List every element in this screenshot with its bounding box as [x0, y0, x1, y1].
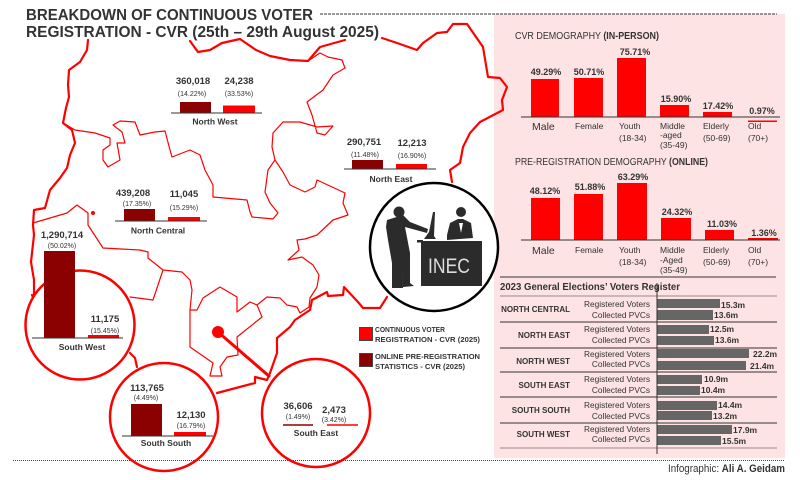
bar chart: CVR demography in-person: Middle [660, 121, 685, 131]
credit: Infographic: Ali A. Geidam [668, 463, 785, 475]
zone: North Central: North Central [131, 226, 185, 236]
table: 2023 voters register by zone: NORTH WEST [516, 357, 570, 366]
zone: South West callout: South West [59, 342, 105, 352]
table: 2023 voters register by zone: NORTH CENTRAL [501, 305, 570, 314]
bar chart: CVR demography in-person: (50-69) [703, 133, 731, 143]
zone: South East callout: 2,473 [322, 405, 346, 416]
zone: North East: (16.90%) [398, 153, 426, 160]
zone: North West: 360,018 [176, 76, 210, 87]
zone: North West: (33.53%) [225, 91, 253, 98]
table: 2023 voters register by zone: 21.4m [750, 361, 775, 371]
legend: ONLINE PRE-REGISTRATION [375, 354, 480, 361]
bar chart: pre-registration demography online: Elderly [703, 245, 730, 255]
heading: CVR demography: CVR DEMOGRAPHY (IN-PERSON) [515, 31, 659, 42]
zone: South West callout: (50.02%) [48, 243, 76, 250]
bar chart: CVR demography in-person: (18-34) [619, 133, 647, 143]
INEC badge icon: INEC [428, 255, 470, 278]
bar chart: pre-registration demography online: Middle [660, 245, 685, 255]
heading: pre-registration demography: PRE-REGISTRATION DEMOGRAPHY (ONLINE) [515, 157, 708, 168]
table: 2023 voters register by zone: 10.9m [704, 374, 729, 384]
table: 2023 voters register by zone: Registered Voters [584, 324, 650, 334]
bar chart: CVR demography in-person: Old [748, 121, 762, 131]
zone: South South callout: South South [141, 438, 191, 448]
title [26, 7, 379, 41]
table: 2023 voters register by zone: NORTH EAST [518, 331, 570, 340]
table: 2023 voters register by zone: Collected PVCs [592, 310, 650, 320]
heading: 2023 voters register: 2023 General Elections’ Voters Register [500, 281, 680, 293]
zone: South West callout: 1,290,714 [41, 230, 84, 241]
bar chart: CVR demography in-person: 50.71% [574, 67, 604, 77]
bar chart: pre-registration demography online: Male [532, 245, 555, 257]
bar chart: CVR demography in-person: 0.97% [749, 106, 775, 116]
zone: South South callout: (16.79%) [177, 423, 205, 430]
table: 2023 voters register by zone: 12.5m [710, 324, 735, 334]
zone: South South callout: (4.49%) [134, 395, 158, 402]
zone: North Central [115, 188, 207, 236]
zone: North East: North East [370, 174, 413, 184]
bar chart: pre-registration demography online [521, 172, 780, 275]
connector from map to South East callout [212, 326, 270, 377]
legend: STATISTICS - CVR (2025) [375, 364, 465, 371]
bar chart: pre-registration demography online: Old [748, 245, 762, 255]
panel: demography and register background [494, 14, 785, 458]
zone: South South callout: 113,765 [130, 383, 165, 394]
zone: South East callout: South East [294, 428, 338, 438]
zone: North East [344, 137, 436, 184]
zone: South South callout [110, 363, 218, 471]
bar chart: CVR demography in-person: Elderly [703, 121, 730, 131]
table: 2023 voters register by zone [500, 283, 778, 454]
table: 2023 voters register by zone: Registered Voters [584, 374, 650, 384]
table: 2023 voters register by zone: Registered Voters [584, 400, 650, 410]
bar chart: pre-registration demography online: (50-69) [703, 257, 731, 267]
bar chart: CVR demography in-person: -aged [660, 130, 682, 140]
zone: South East callout: (1.49%) [286, 414, 310, 421]
bar chart: CVR demography in-person: Youth [619, 121, 641, 131]
table: 2023 voters register by zone: SOUTH SOUTH [512, 406, 570, 415]
bar chart: pre-registration demography online: (70+) [748, 257, 768, 267]
legend: REGISTRATION - CVR (2025) [375, 337, 480, 344]
table: 2023 voters register by zone: 13.2m [713, 411, 738, 421]
zone: South West callout: (15.45%) [91, 328, 119, 335]
bar chart: CVR demography in-person: Female [575, 121, 604, 131]
zone: North West: North West [192, 116, 238, 126]
table: 2023 voters register by zone: Registered Voters [584, 349, 650, 359]
legend: CONTINUOUS VOTER [375, 327, 445, 334]
bar chart: CVR demography in-person: (35-49) [660, 140, 688, 150]
bar chart: pre-registration demography online: 1.36% [751, 228, 777, 238]
table: 2023 voters register by zone: Collected PVCs [592, 385, 650, 395]
zone: South West callout: 11,175 [91, 314, 120, 325]
bar chart: pre-registration demography online: 51.88% [575, 182, 605, 192]
zone: North East: (11.48%) [351, 152, 379, 159]
bar chart: CVR demography in-person: 49.29% [531, 67, 561, 77]
table: 2023 voters register by zone: 14.4m [718, 400, 743, 410]
table: 2023 voters register by zone: 10.4m [701, 385, 726, 395]
zone: North East: 12,213 [397, 138, 427, 149]
zone: South West callout [26, 230, 134, 380]
table: 2023 voters register by zone: Registered Voters [584, 299, 650, 309]
bar chart: pre-registration demography online: Youth [619, 245, 641, 255]
bar chart: pre-registration demography online: -Aged [660, 255, 683, 265]
zone: North West [171, 76, 262, 126]
title: BREAKDOWN OF CONTINUOUS VOTER [26, 7, 313, 24]
bar chart: CVR demography in-person: 17.42% [703, 101, 733, 111]
map of Nigeria with geopolitical zones [31, 24, 507, 393]
bar chart: CVR demography in-person: 15.90% [661, 94, 691, 104]
bar chart: CVR demography in-person: 75.71% [620, 47, 650, 57]
bar chart: CVR demography in-person [521, 47, 780, 150]
zone: North East: 290,751 [347, 137, 382, 148]
bar chart: pre-registration demography online: (18-34) [619, 257, 647, 267]
table: 2023 voters register by zone: 17.9m [733, 425, 758, 435]
zone: South East callout [262, 359, 370, 467]
bar chart: pre-registration demography online: (35-49) [660, 265, 688, 275]
bar chart: pre-registration demography online: Female [575, 245, 604, 255]
zone: South East callout: (3.42%) [322, 417, 346, 424]
zone: North West: (14.22%) [178, 91, 206, 98]
zone: North Central: 11,045 [170, 189, 199, 200]
bar chart: pre-registration demography online: 11.03% [707, 219, 737, 229]
table: 2023 voters register by zone: 13.6m [714, 310, 739, 320]
table: 2023 voters register by zone: Collected PVCs [592, 335, 650, 345]
zone: North West: 24,238 [224, 76, 254, 87]
bar chart: pre-registration demography online: 63.29% [618, 172, 648, 182]
table: 2023 voters register by zone: SOUTH WEST [517, 430, 570, 439]
bar chart: pre-registration demography online: 48.12% [530, 186, 560, 196]
legend [360, 327, 480, 371]
zone: South South callout: 12,130 [176, 410, 206, 421]
table: 2023 voters register by zone: Collected PVCs [592, 411, 650, 421]
zone: South East callout: 36,606 [283, 401, 313, 412]
bar chart: pre-registration demography online: 24.32% [662, 207, 692, 217]
zone: North Central: (17.35%) [123, 201, 151, 208]
bar chart: CVR demography in-person: (70+) [748, 133, 768, 143]
bar chart: CVR demography in-person: Male [532, 121, 555, 133]
table: 2023 voters register by zone: 22.2m [753, 349, 778, 359]
table: 2023 voters register by zone: 15.5m [722, 436, 747, 446]
zone: North Central: (15.29%) [170, 205, 198, 212]
table: 2023 voters register by zone: 13.6m [715, 335, 740, 345]
title: REGISTRATION - CVR (25th – 29th August 2025) [26, 24, 379, 41]
table: 2023 voters register by zone: Collected PVCs [592, 359, 650, 369]
INEC badge icon [370, 183, 498, 311]
table: 2023 voters register by zone: Collected PVCs [592, 434, 650, 444]
zone: North Central: 439,208 [116, 188, 150, 199]
table: 2023 voters register by zone: SOUTH EAST [518, 381, 570, 390]
table: 2023 voters register by zone: Registered Voters [584, 424, 650, 434]
table: 2023 voters register by zone: 15.3m [721, 300, 746, 310]
